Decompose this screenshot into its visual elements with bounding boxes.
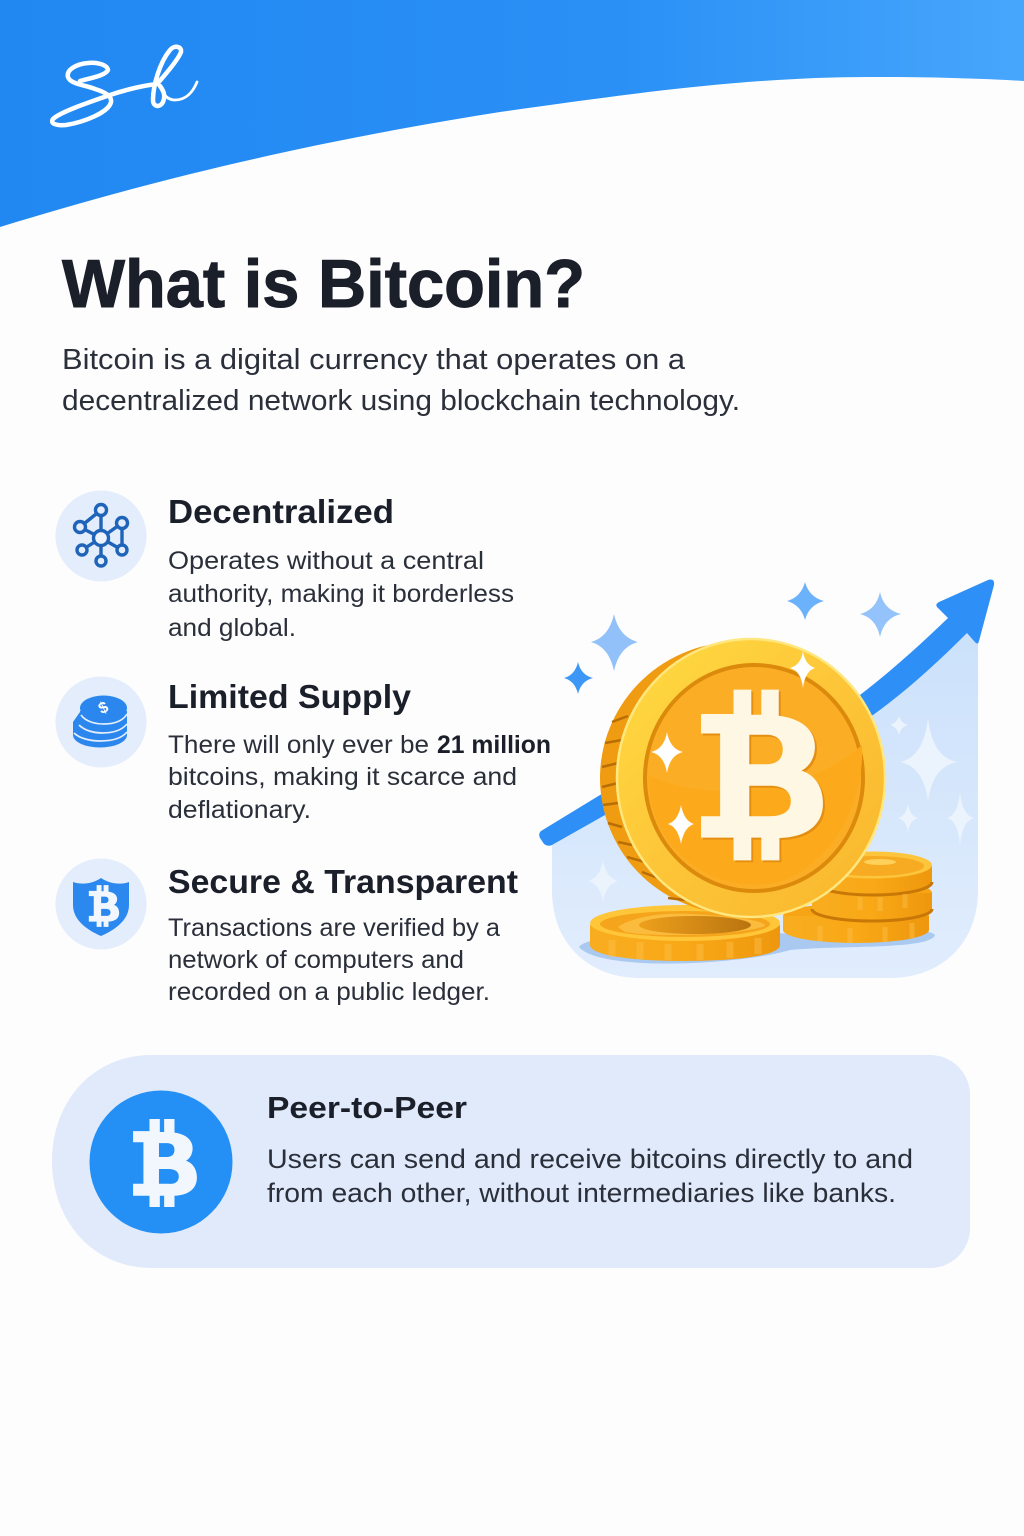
feature: decentralized bbox=[56, 490, 514, 642]
heading: secure and transparent: Secure & Transparent bbox=[168, 863, 518, 900]
description: limited supply: deflationary. bbox=[168, 796, 311, 824]
description: peer-to-peer: Users can send and receive bitcoins directly to and bbox=[267, 1144, 913, 1174]
coin face bbox=[617, 639, 885, 917]
description: secure and transparent: recorded on a public ledger. bbox=[168, 978, 490, 1006]
illustration: bitcoin growth bbox=[539, 580, 994, 978]
bitcoin symbol bbox=[701, 690, 823, 860]
description: peer-to-peer bbox=[267, 1144, 913, 1208]
description: decentralized: Operates without a central bbox=[168, 547, 484, 575]
icon: network bbox=[56, 490, 146, 582]
heading: peer-to-peer: Peer-to-Peer bbox=[267, 1090, 467, 1125]
description: peer-to-peer: from each other, without intermediaries like banks. bbox=[267, 1178, 896, 1208]
chart area panel bbox=[552, 628, 978, 978]
coin sparkles bbox=[651, 651, 815, 844]
logo signature bbox=[52, 47, 197, 125]
description: limited supply bbox=[168, 731, 551, 824]
sparkles: pale bbox=[588, 716, 974, 902]
intro text: Bitcoin is a digital currency that operates on a bbox=[62, 344, 686, 376]
heading: limited supply: Limited Supply bbox=[168, 678, 412, 715]
description: secure and transparent: network of computers and bbox=[168, 946, 464, 974]
bitcoin symbol shadow bbox=[703, 692, 825, 862]
feature: secure and transparent bbox=[56, 858, 518, 1006]
sparkles: blue bbox=[564, 582, 901, 694]
icon: coin stack bbox=[56, 676, 146, 768]
icon: coin stack: $ bbox=[96, 699, 111, 718]
description: secure and transparent bbox=[168, 914, 500, 1006]
description: limited supply: 21 million bbox=[437, 731, 551, 759]
panel background bbox=[52, 1055, 970, 1268]
description: decentralized: and global. bbox=[168, 614, 296, 642]
panel: peer-to-peer bbox=[52, 1055, 970, 1268]
description: secure and transparent: Transactions are verified by a bbox=[168, 914, 500, 942]
coin: front flat bbox=[590, 905, 780, 961]
icon: bitcoin circle bbox=[90, 1090, 232, 1234]
icon: shield bbox=[56, 858, 146, 950]
coin edge bbox=[591, 633, 883, 923]
title: What is Bitcoin? bbox=[62, 246, 585, 322]
description: decentralized: authority, making it borderless bbox=[168, 580, 514, 608]
description: limited supply: There will only ever be bbox=[168, 731, 429, 759]
coin stack: right bbox=[783, 852, 932, 943]
ground shadow bbox=[579, 930, 935, 964]
feature: limited supply bbox=[56, 676, 551, 824]
description: decentralized bbox=[168, 547, 514, 642]
growth arrow bbox=[539, 580, 994, 846]
header wave bbox=[0, 0, 1024, 227]
intro text bbox=[62, 344, 740, 417]
description: limited supply: bitcoins, making it scarce and bbox=[168, 763, 517, 791]
heading: decentralized: Decentralized bbox=[168, 493, 394, 530]
intro text: decentralized network using blockchain technology. bbox=[62, 385, 740, 417]
coin: main bitcoin bbox=[591, 633, 885, 923]
